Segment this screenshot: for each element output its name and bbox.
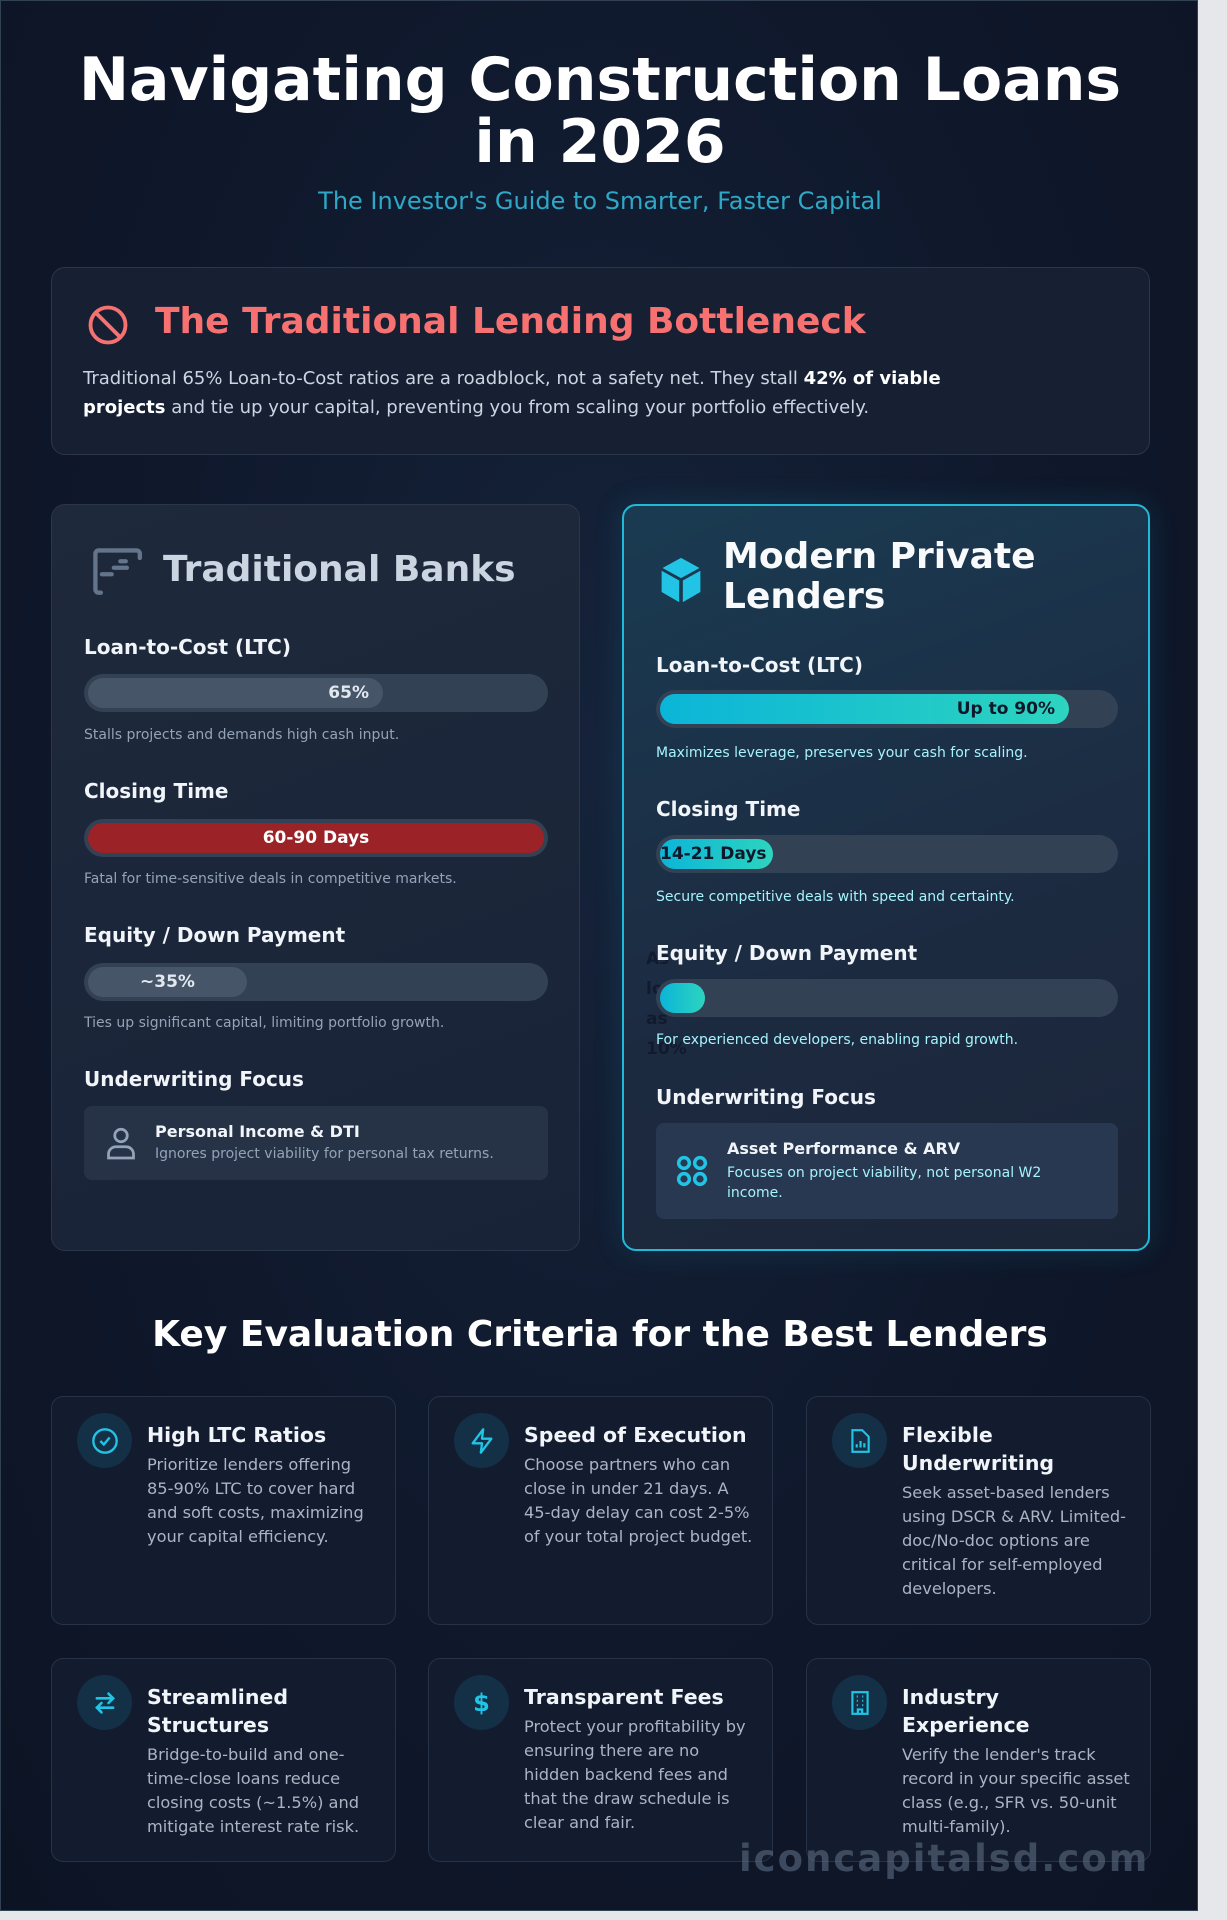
card: streamlined: Streamlined Structures bbox=[147, 1685, 288, 1737]
metric: underwriting: Underwriting Focus bbox=[84, 1067, 304, 1091]
panel: modern private lenders: Equity / Down Payment bbox=[656, 941, 917, 965]
card: transparent fees: Transparent Fees bbox=[524, 1685, 724, 1709]
panel: traditional banks: 60-90 Days bbox=[263, 828, 369, 848]
card: transparent fees: $ bbox=[473, 1688, 490, 1716]
heading: The Traditional Lending Bottleneck bbox=[155, 301, 866, 342]
panel: modern private lenders: 14-21 Days bbox=[660, 844, 767, 864]
card: transparent fees bbox=[428, 1658, 773, 1862]
panel: modern private lenders: Maximizes leverage, preserves your cash for scaling. bbox=[656, 745, 1028, 761]
icon: grid bbox=[676, 1156, 708, 1186]
card: flexible underwriting: Seek asset-based lenders using DSCR & ARV. Limited-doc/No-doc options are critical for self-employed developers. bbox=[902, 1483, 1126, 1598]
icon: cube bbox=[662, 558, 700, 602]
metric: LTC: Loan-to-Cost (LTC) bbox=[656, 653, 863, 677]
icon: bank doc bbox=[93, 548, 142, 595]
panel: traditional lending bottleneck bbox=[51, 267, 1150, 455]
metric: equity: Equity / Down Payment bbox=[84, 923, 345, 947]
metric: equity: As low as 10% bbox=[646, 949, 687, 1059]
title: Navigating Construction Loans bbox=[79, 45, 1121, 115]
heading: Modern Private bbox=[723, 536, 1036, 577]
panel: traditional banks: Stalls projects and demands high cash input. bbox=[84, 727, 399, 743]
panel: traditional banks bbox=[51, 504, 580, 1251]
panel: traditional banks: Personal Income & DTI bbox=[155, 1122, 360, 1141]
metric: LTC: Loan-to-Cost (LTC) bbox=[84, 635, 291, 659]
card: flexible underwriting: Flexible Underwriting bbox=[902, 1423, 1054, 1475]
card: streamlined: Bridge-to-build and one-time-close loans reduce closing costs (~1.5%) and mitigate interest rate risk. bbox=[147, 1745, 359, 1836]
card: industry experience: Industry Experience bbox=[902, 1685, 1030, 1737]
title: in 2026 bbox=[474, 107, 726, 177]
panel: modern private lenders bbox=[622, 504, 1150, 1251]
panel: modern private lenders: Up to 90% bbox=[957, 699, 1055, 719]
card: flexible underwriting bbox=[806, 1396, 1151, 1625]
card: streamlined bbox=[51, 1658, 396, 1862]
panel: traditional banks: 65% bbox=[328, 683, 369, 703]
card: high LTC bbox=[51, 1396, 396, 1625]
heading bbox=[723, 536, 1036, 617]
panel: modern private lenders: Secure competitive deals with speed and certainty. bbox=[656, 889, 1015, 905]
card: industry experience bbox=[806, 1658, 1151, 1862]
card: industry experience: Verify the lender's track record in your specific asset class (e.g., SFR vs. 50-unit multi-family). bbox=[902, 1745, 1130, 1836]
metric: underwriting: Underwriting Focus bbox=[656, 1085, 876, 1109]
card: speed: Speed of Execution bbox=[524, 1423, 747, 1447]
metric: closing time: Closing Time bbox=[656, 797, 800, 821]
panel: traditional banks: Ties up significant capital, limiting portfolio growth. bbox=[84, 1015, 444, 1031]
card: high LTC: High LTC Ratios bbox=[147, 1423, 326, 1447]
panel: modern private lenders: For experienced developers, enabling rapid growth. bbox=[656, 1032, 1018, 1048]
panel: modern private lenders: Asset Performance & ARV bbox=[727, 1139, 960, 1158]
watermark: iconcapitalsd.com bbox=[739, 1837, 1149, 1880]
subtitle: The Investor's Guide to Smarter, Faster Capital bbox=[318, 187, 882, 215]
metric: closing time: Closing Time bbox=[84, 779, 228, 803]
heading: Traditional Banks bbox=[163, 549, 516, 590]
section heading: Key Evaluation Criteria for the Best Lenders bbox=[152, 1314, 1048, 1355]
icon: ban bbox=[88, 306, 128, 344]
title bbox=[79, 45, 1121, 177]
card: speed bbox=[428, 1396, 773, 1625]
panel: traditional banks: ~35% bbox=[140, 972, 195, 992]
icon: person bbox=[107, 1128, 135, 1160]
card: speed: Choose partners who can close in under 21 days. A 45-day delay can cost 2-5% of your total project budget. bbox=[524, 1455, 752, 1546]
panel: traditional banks: Ignores project viability for personal tax returns. bbox=[155, 1146, 494, 1162]
panel: traditional banks: Fatal for time-sensitive deals in competitive markets. bbox=[84, 871, 457, 887]
card: high LTC: Prioritize lenders offering 85-90% LTC to cover hard and soft costs, maximizing your capital efficiency. bbox=[147, 1455, 364, 1546]
panel: modern private lenders: Focuses on project viability, not personal W2 income. bbox=[727, 1165, 1041, 1201]
card: transparent fees: Protect your profitability by ensuring there are no hidden backend fees and that the draw schedule is clear and fair. bbox=[524, 1717, 746, 1832]
heading: Lenders bbox=[723, 576, 885, 617]
body text: Traditional 65% Loan-to-Cost ratios are a roadblock, not a safety net. They stall 42% of viable projects and tie up your capital, preventing you from scaling your portfolio effectively. bbox=[83, 368, 941, 418]
